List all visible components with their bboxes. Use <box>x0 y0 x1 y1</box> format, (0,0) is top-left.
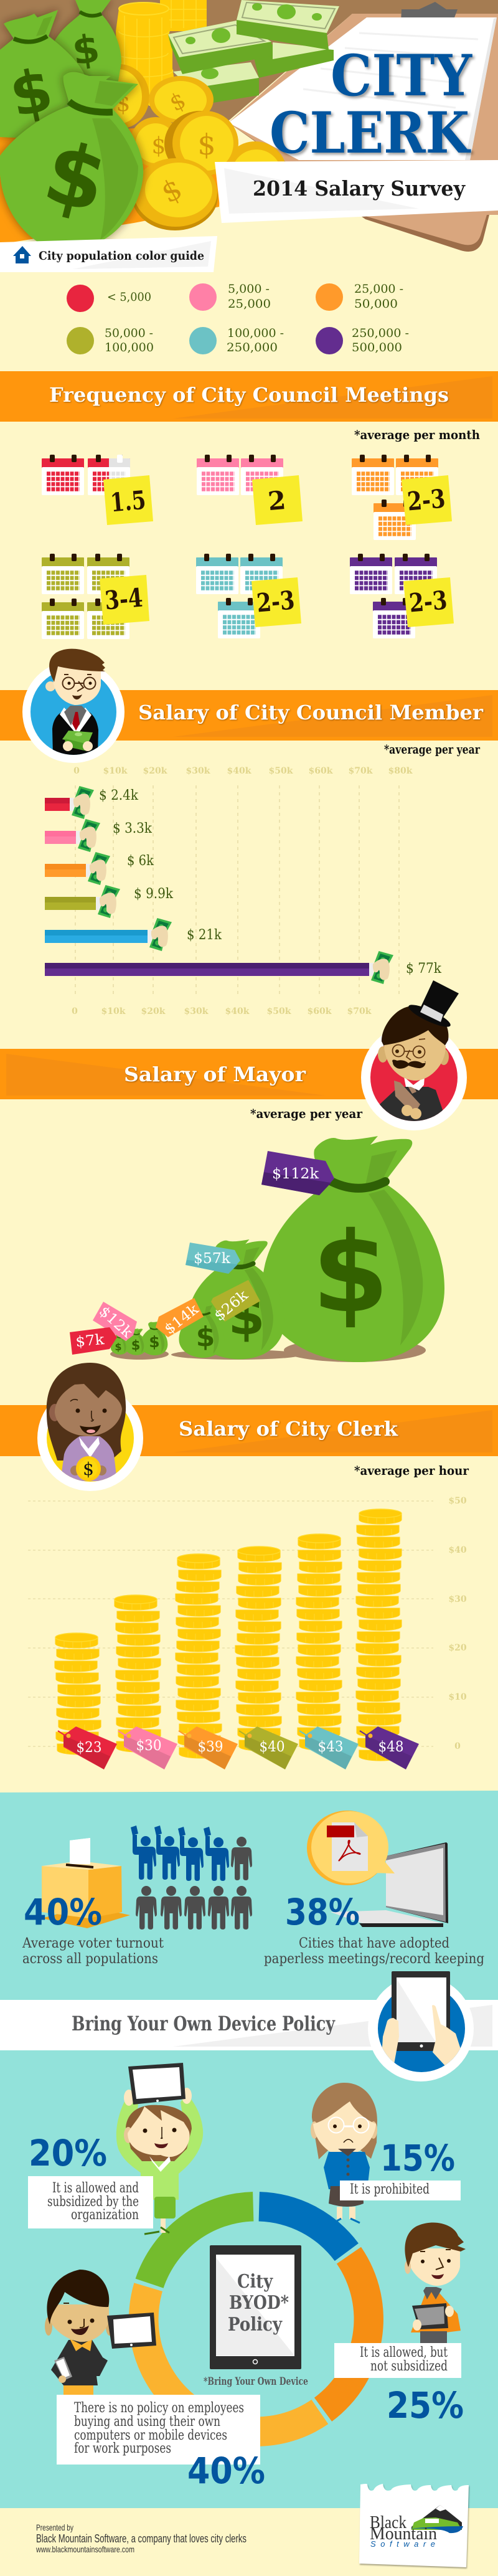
bag: $7k: $ <box>115 1341 122 1353</box>
stack: $39 <box>176 1554 222 1758</box>
calendars: 250,000-500,000: 2-3 <box>408 585 448 618</box>
population color legend: 25,000 - <box>354 282 403 296</box>
bag: left: $ <box>4 55 59 131</box>
top axis labels: $30k <box>186 766 210 776</box>
bag: $14k <box>141 1322 167 1355</box>
calendars: 5,000-25,000 <box>197 455 303 525</box>
label: allowed, not subsidized: It is allowed, but <box>360 2345 448 2361</box>
stat: 25%: 25% <box>387 2384 464 2427</box>
bag: $12k <box>125 1328 146 1355</box>
bag: rear: $ <box>70 26 102 74</box>
top axis labels: $40k <box>227 766 251 776</box>
bar: $2.4k <box>45 786 139 819</box>
bag: $7k <box>111 1333 128 1355</box>
bar chart: council member salaries <box>45 766 442 1016</box>
bar: $9.9k <box>45 885 174 918</box>
big gold coins: $ <box>156 171 187 210</box>
population color legend: 5,000 - <box>228 282 270 296</box>
price tag: $48: $48 <box>378 1739 403 1755</box>
bar: $2.4k: $ 2.4k <box>99 788 139 803</box>
calendars: 25,000-50,000: 2-3 <box>406 483 446 517</box>
bottom axis labels: $70k <box>347 1006 372 1016</box>
calendars: under 5,000 <box>42 455 153 525</box>
big gold coins: $ <box>152 133 166 159</box>
bag: $12k: $ <box>131 1338 140 1353</box>
subtitle banner <box>215 160 498 223</box>
tag: $112k: $112k <box>272 1166 319 1182</box>
chart gridlines <box>75 785 399 997</box>
label: no policy: buying and using their own <box>74 2414 220 2430</box>
population color legend: < 5,000 <box>107 290 151 304</box>
person: woman with glasses <box>311 2083 377 2223</box>
caption: paperless meetings <box>264 1936 484 1967</box>
tag: $26k: $26k <box>211 1287 251 1325</box>
tag: $112k <box>261 1151 334 1195</box>
stat: 40%: 40% <box>24 1891 102 1933</box>
header illustration <box>0 0 498 272</box>
label: allowed, not subsidized <box>334 2343 461 2378</box>
caption: paperless meetings: Cities that have adopted <box>299 1936 449 1951</box>
tag: $14k: $14k <box>161 1300 202 1338</box>
label: prohibited <box>340 2181 461 2200</box>
label: allowed and subsidized: subsidized by the <box>47 2194 139 2210</box>
population color legend: 100,000 <box>105 341 154 354</box>
top axis labels: 0 <box>73 766 80 776</box>
bottom axis labels: $40k <box>225 1006 250 1016</box>
price tag: $30: $30 <box>136 1738 162 1754</box>
logo note: Black Mountain Software: Software <box>370 2539 435 2549</box>
person: man with tablet and phone <box>45 2270 156 2396</box>
banner: mayor salary: Salary of Mayor <box>124 1063 306 1086</box>
calendars: under 5,000: 1.5 <box>109 485 147 518</box>
top axis labels: $50k <box>269 766 293 776</box>
tag: $7k: $7k <box>75 1332 106 1350</box>
price tag: $43: $43 <box>317 1739 344 1755</box>
cash stacks <box>168 0 339 103</box>
center tablet: City BYOD Policy: Policy <box>228 2314 283 2336</box>
banner: council member salary: Salary of City Council Member <box>138 701 484 724</box>
person: man with tablet <box>405 2222 466 2344</box>
tag: $7k <box>70 1327 117 1355</box>
bar: $9.9k: $ 9.9k <box>134 886 174 902</box>
note: per year: *average per year <box>250 1106 362 1121</box>
title <box>270 43 472 166</box>
bar: $3.3k: $ 3.3k <box>113 821 153 836</box>
bar: $6k: $ 6k <box>127 853 154 869</box>
coin stacks <box>111 0 207 106</box>
bar: $77k <box>45 951 442 984</box>
calendars: 50,000-100,000: 3-4 <box>103 582 144 616</box>
footer credits: Presented by <box>36 2522 73 2532</box>
bag: $26k: $ <box>196 1321 215 1353</box>
icon: laptop <box>331 1842 448 1927</box>
label: no policy: There is no policy on employees <box>74 2400 244 2416</box>
bag: front: $ <box>35 123 116 232</box>
horizontal gridlines <box>28 1501 433 1746</box>
banner: bring your own device <box>0 2000 498 2050</box>
bag: $57k <box>188 1239 284 1359</box>
center tablet: City BYOD Policy: City <box>237 2271 273 2293</box>
color guide heading: City population color guide <box>39 249 204 263</box>
icon: non-voters <box>136 1837 252 1930</box>
icon: pdf speech bubble <box>307 1811 395 1885</box>
clipboard <box>228 2 498 252</box>
tag: $26k <box>211 1280 260 1325</box>
calendars: 25,000-50,000 <box>352 455 452 540</box>
ground shadows <box>110 1338 426 1362</box>
bar: $3.3k <box>45 819 153 852</box>
top axis labels: $80k <box>388 766 413 776</box>
bottom axis labels: $60k <box>308 1006 332 1016</box>
top axis labels <box>73 766 413 776</box>
bag: $57k: $ <box>228 1286 265 1347</box>
banner: city clerk salary <box>0 1405 498 1456</box>
big gold coins: $ <box>166 87 190 116</box>
title: CITY <box>331 43 472 109</box>
y axis labels: $40 <box>448 1545 467 1555</box>
label: no policy: computers or mobile devices <box>74 2428 227 2443</box>
top axis labels: $70k <box>349 766 373 776</box>
icon: house <box>13 246 31 263</box>
icon: top hat <box>406 980 459 1031</box>
icon: mountain logo <box>410 2505 463 2533</box>
label: allowed and subsidized: organization <box>71 2207 139 2223</box>
stat: 40%: 40% <box>187 2450 265 2492</box>
icon: ballot box <box>42 1838 130 1928</box>
bag: $14k: $ <box>149 1333 160 1351</box>
label: allowed and subsidized <box>28 2176 153 2228</box>
note: per month: *average per month <box>354 427 480 442</box>
stack: $40 <box>235 1546 281 1751</box>
bag: left <box>0 10 87 140</box>
bottom axis labels: $20k <box>141 1006 166 1016</box>
y axis labels: $50 <box>448 1496 467 1506</box>
icon: tablet <box>107 2313 156 2349</box>
segment: 15% prohibited <box>259 2192 359 2261</box>
y axis labels: $30 <box>448 1594 467 1604</box>
tag: $57k <box>186 1243 240 1274</box>
caption: voter turnout: Average voter turnout <box>22 1936 164 1951</box>
portrait: council member <box>22 649 125 763</box>
coin stack chart: clerk hourly pay <box>28 1496 467 1769</box>
icon: phone <box>54 2357 72 2383</box>
banner: frequency of meetings: Frequency of City Council Meetings <box>49 383 449 407</box>
stat: 38%: 38% <box>285 1891 360 1933</box>
bag: $26k <box>179 1302 224 1358</box>
title: CLERK <box>270 100 471 166</box>
price tag: $23: $23 <box>76 1740 102 1756</box>
price tag: $43 <box>299 1726 359 1769</box>
y axis labels: $10 <box>448 1692 467 1702</box>
money bag chart: mayor salaries <box>70 1136 444 1362</box>
big gold coins <box>90 64 286 230</box>
money bags <box>0 0 143 242</box>
portrait: mayor <box>361 980 467 1130</box>
stack: $23 <box>55 1633 101 1754</box>
segment: 20% allowed and subsidized <box>136 2192 253 2288</box>
population color legend: 250,000 <box>227 341 278 354</box>
price tag: $40 <box>239 1726 298 1769</box>
segment: 25% allowed, not subsidized <box>314 2247 383 2422</box>
banner: bring your own device: Bring Your Own Device Policy <box>72 2012 336 2035</box>
bottom axis labels: $30k <box>184 1006 209 1016</box>
icon: cash in hands <box>62 731 93 751</box>
icon: dollar coin <box>76 1456 101 1481</box>
big gold coins: $ <box>197 128 216 161</box>
caption: voter turnout: across all populations <box>22 1951 158 1967</box>
icon: dollar coin: $ <box>83 1459 94 1479</box>
logo note: Black Mountain Software: Black <box>370 2512 406 2532</box>
y axis labels: $20 <box>448 1643 467 1653</box>
calendars: 100,000-250,000 <box>196 554 301 638</box>
panel: voter turnout <box>22 1825 252 1967</box>
footer credits: www.blackmountainsoftware.com <box>35 2544 134 2554</box>
bottom axis labels: 0 <box>72 1006 78 1016</box>
bag: front <box>0 72 143 242</box>
label: allowed and subsidized: It is allowed and <box>52 2181 139 2196</box>
donut chart: BYOD policy shares <box>129 2192 383 2446</box>
big gold coins: $ <box>116 91 130 116</box>
y axis labels <box>448 1496 467 1751</box>
stack: $30 <box>115 1595 161 1752</box>
caption: voter turnout <box>22 1936 164 1967</box>
label: allowed, not subsidized: not subsidized <box>370 2359 448 2374</box>
center tablet: City BYOD Policy: BYOD* <box>229 2292 289 2314</box>
footer credits <box>35 2522 247 2554</box>
bar: $6k <box>45 852 154 885</box>
bottom axis labels: $50k <box>267 1006 291 1016</box>
center tablet: City BYOD Policy <box>210 2245 301 2369</box>
calendars: 5,000-25,000: 2 <box>266 485 287 516</box>
bag: $112k <box>262 1136 444 1362</box>
calendars: 50,000-100,000 <box>42 554 149 639</box>
panel: paperless meetings <box>264 1811 484 1967</box>
bag: rear <box>55 0 121 93</box>
note: per hour: *average per hour <box>354 1463 469 1478</box>
population color legend: 50,000 <box>354 297 398 311</box>
footnote: bring your own device: *Bring Your Own Device <box>204 2375 308 2388</box>
label: no policy <box>57 2395 260 2465</box>
teal section background <box>0 1791 498 2508</box>
population color legend <box>67 282 409 354</box>
price tag: $48 <box>360 1726 419 1769</box>
stack: $43 <box>296 1534 342 1750</box>
icon: voters raising ballots <box>131 1825 229 1881</box>
stat: 20%: 20% <box>29 2132 107 2174</box>
population color legend: 500,000 <box>352 341 402 354</box>
price tag: $40: $40 <box>259 1739 285 1755</box>
calendars: 250,000-500,000 <box>350 554 454 638</box>
bottom axis labels: $10k <box>101 1006 126 1016</box>
tag: $57k: $57k <box>194 1251 231 1267</box>
bar: $77k: $ 77k <box>406 961 442 977</box>
icon: tablet overhead <box>128 2063 186 2105</box>
banner: frequency of meetings <box>0 371 498 422</box>
logo note: Black Mountain Software <box>359 2484 469 2567</box>
bar: $21k <box>45 918 222 951</box>
color guide heading <box>0 236 217 272</box>
price tag: $23 <box>58 1726 117 1769</box>
bar: $21k: $ 21k <box>187 927 222 943</box>
population color legend: 250,000 - <box>352 326 409 340</box>
bottom axis labels <box>72 1006 372 1016</box>
price tag: $39 <box>179 1726 238 1769</box>
portrait: city clerk <box>37 1363 143 1491</box>
stat: 15%: 15% <box>380 2137 455 2179</box>
bag: $112k: $ <box>312 1208 389 1337</box>
top axis labels: $60k <box>309 766 333 776</box>
icon: hands holding tablet <box>368 1971 474 2081</box>
label: no policy: for work purposes <box>74 2441 171 2456</box>
orange backdrop <box>0 125 224 244</box>
tag: $12k: $12k <box>96 1303 136 1342</box>
population color legend: 50,000 - <box>105 326 153 340</box>
footer credits: Black Mountain Software, a company that loves city clerks <box>36 2532 247 2545</box>
banner: mayor salary <box>0 1049 498 1099</box>
label: prohibited: It is prohibited <box>350 2182 430 2197</box>
segment: 40% no policy <box>129 2283 328 2446</box>
price tag: $30 <box>118 1726 177 1769</box>
population color legend: 100,000 - <box>227 326 284 340</box>
top axis labels: $20k <box>143 766 167 776</box>
person: woman holding tablet overhead <box>116 2063 203 2234</box>
banner: city clerk salary: Salary of City Clerk <box>179 1417 398 1441</box>
subtitle banner: 2014 Salary Survey <box>253 176 466 201</box>
population color legend: 25,000 <box>228 297 271 311</box>
logo note: Black Mountain Software: Mountain <box>370 2524 437 2544</box>
paper sheet <box>228 17 497 160</box>
stack: $48 <box>356 1509 402 1761</box>
icon: tablet in hand <box>412 2303 454 2331</box>
y axis labels: 0 <box>454 1741 461 1751</box>
banner: council member salary <box>0 690 498 741</box>
footer background <box>0 2508 498 2576</box>
calendars: 100,000-250,000: 2-3 <box>255 585 296 618</box>
desk background <box>0 0 498 137</box>
price tag: $39: $39 <box>198 1739 223 1755</box>
top axis labels: $10k <box>103 766 128 776</box>
